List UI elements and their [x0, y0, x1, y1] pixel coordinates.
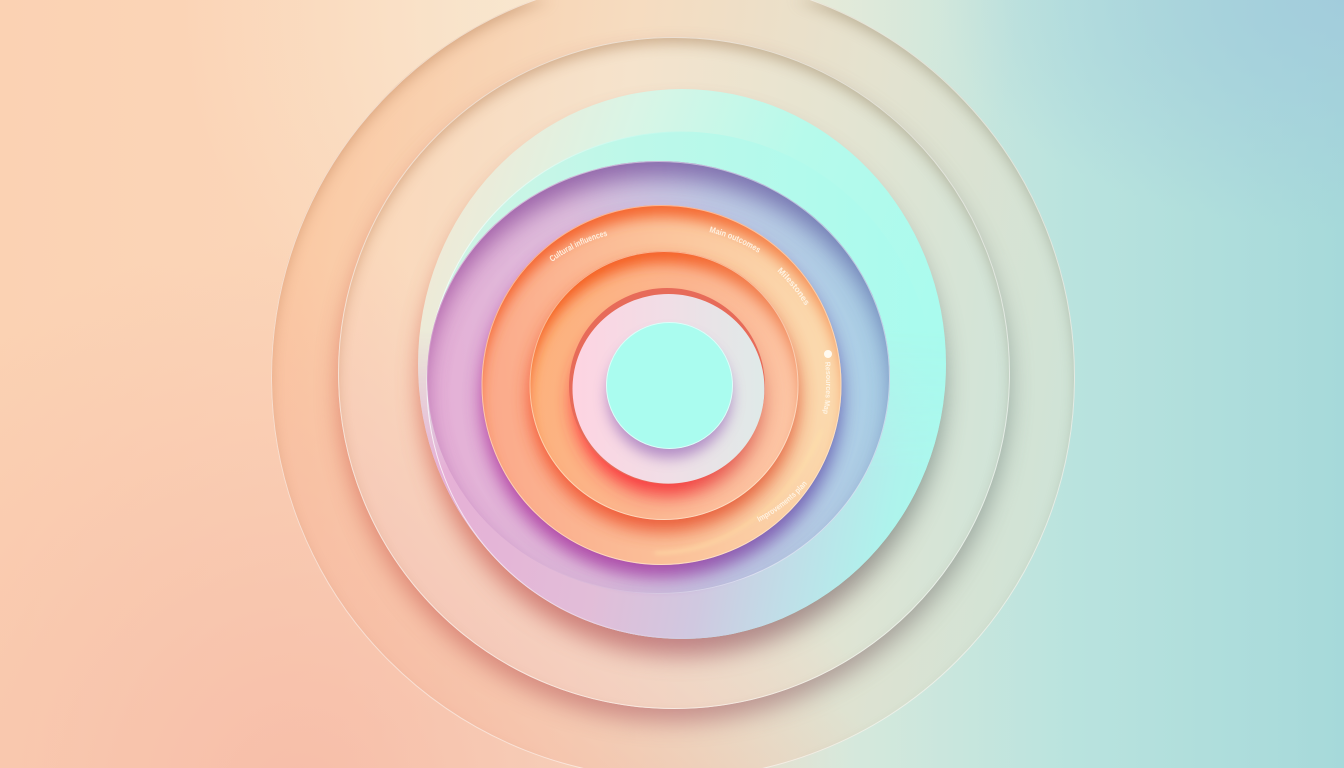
ring 2 [326, 37, 1022, 736]
ring 5: orange ring with labels [469, 205, 854, 590]
ring 4: purple to blue disc [427, 161, 890, 594]
ring 1: outermost circle [271, 0, 1075, 768]
label: lower right: Improvements plan [757, 482, 807, 522]
ring 7: red crescent and pale disc [569, 288, 765, 496]
label: right upper: Milestones [778, 267, 808, 305]
label: top right: Main outcomes [710, 226, 760, 252]
label: top left: Cultural influences [550, 232, 608, 261]
label: right side: Resources Map [822, 362, 830, 414]
icon: white dot [824, 350, 832, 358]
ring 3: mint and pink disc [418, 89, 946, 656]
center disc: mint [606, 322, 733, 458]
ring 6: inner orange ring [516, 250, 812, 544]
